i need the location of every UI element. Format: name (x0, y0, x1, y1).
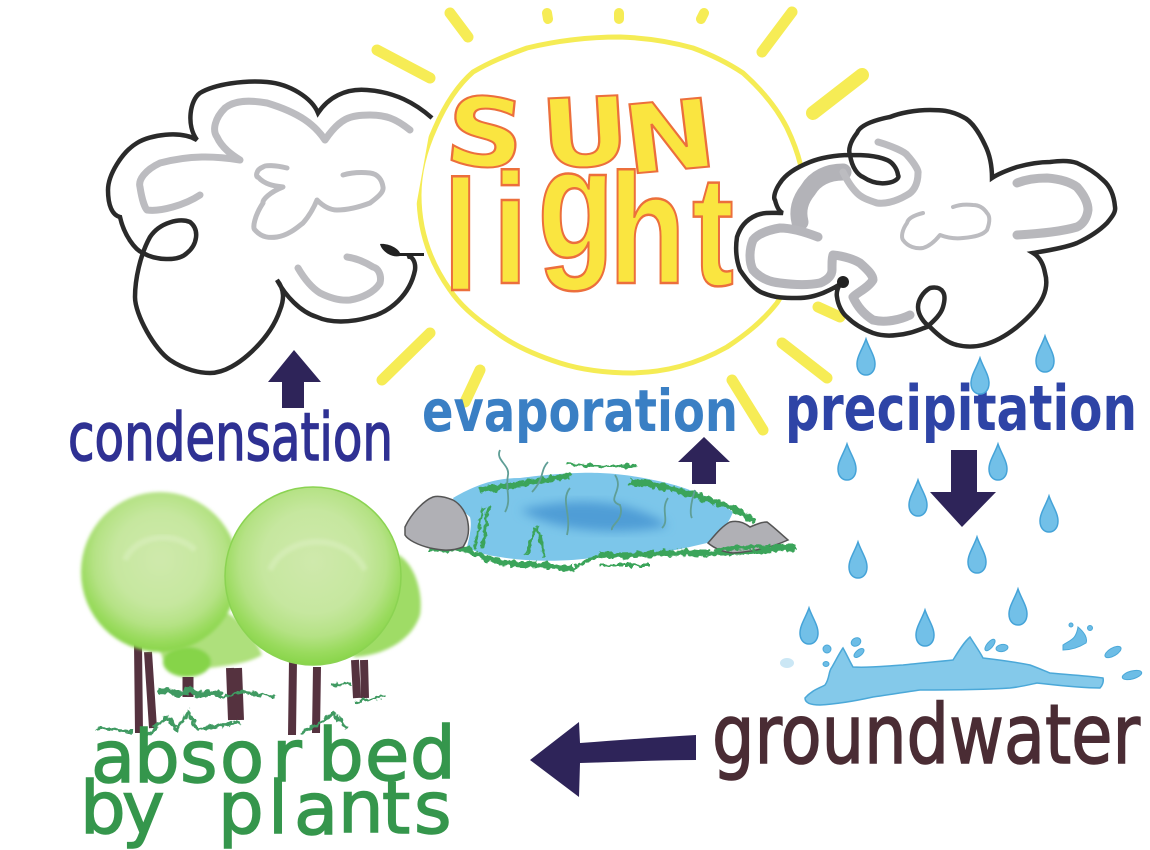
icon: sun (377, 12, 862, 430)
sun rays (377, 12, 862, 430)
icon: left cloud (108, 81, 432, 373)
icon: trees (81, 487, 421, 735)
pond dark water (520, 502, 668, 531)
title: light: light (443, 117, 734, 324)
splashes (823, 623, 1143, 681)
cloud shading thick (799, 172, 843, 222)
pond tendrils (499, 450, 695, 535)
title: SUN: SUN (440, 76, 722, 197)
raindrops (800, 336, 1058, 646)
tree crown left (81, 492, 239, 652)
tree crown right (225, 487, 401, 665)
rock right grass (712, 545, 790, 552)
cloud blob (837, 276, 849, 288)
trunks (138, 643, 365, 735)
grass (97, 683, 387, 735)
rock right (708, 521, 788, 553)
pond green edge (430, 475, 797, 568)
cloud tail blob (380, 244, 424, 256)
arrow: condensation up (268, 350, 321, 408)
cloud shading outline (843, 142, 918, 203)
icon: right cloud (736, 110, 1115, 346)
pond reeds and top line (475, 463, 650, 568)
cloud shading (140, 101, 410, 210)
label: evaporation: evaporation (422, 377, 738, 445)
label: absorbed: absorbed (91, 711, 456, 799)
label: by plants: by plants (80, 765, 452, 850)
icon: pond (405, 450, 797, 568)
arrow: groundwater left (530, 722, 696, 797)
arrow: precipitation down (930, 450, 996, 527)
crown brush marks (125, 538, 365, 570)
arrow: evaporation up (678, 437, 730, 484)
back crowns (159, 552, 421, 677)
rock left (405, 496, 469, 550)
icon: puddle (780, 623, 1143, 705)
label: condensation: condensation (68, 399, 393, 476)
